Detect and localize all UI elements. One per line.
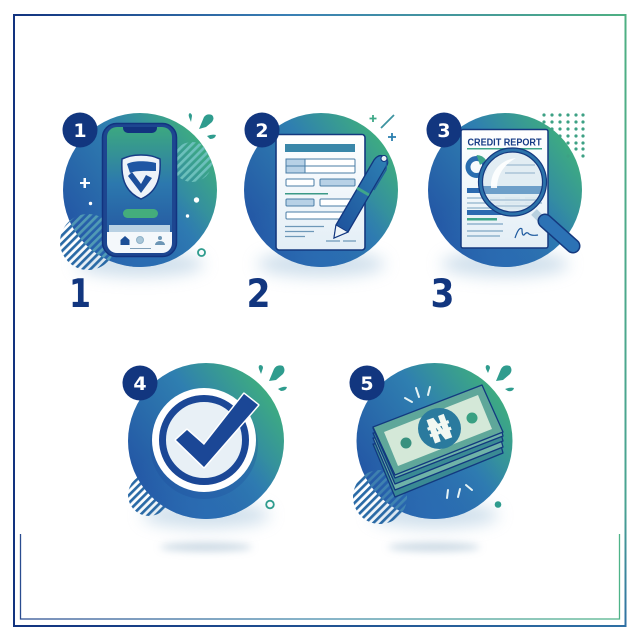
icon: splash accents bbox=[189, 113, 216, 139]
step 3: credit report check bbox=[426, 112, 585, 317]
icon: sparks bbox=[370, 115, 396, 141]
icon: check ring bbox=[152, 388, 256, 492]
disc lower tint bbox=[128, 363, 284, 519]
stripes on disc bbox=[364, 470, 407, 512]
number badge 5: 5 bbox=[360, 373, 374, 395]
soft shadow bbox=[370, 502, 498, 528]
stripes on disc bbox=[70, 142, 212, 260]
icon: credit report document bbox=[461, 130, 548, 248]
number badge 2 bbox=[244, 112, 280, 148]
icon: check mark bbox=[176, 394, 258, 467]
stripe patch bbox=[353, 470, 407, 524]
number badge 4: 4 bbox=[133, 373, 147, 395]
disc bbox=[428, 113, 582, 267]
ground shadow bbox=[388, 542, 480, 552]
ring shadow bbox=[150, 391, 258, 499]
number badge 1 bbox=[62, 112, 98, 148]
step number 1: 1 bbox=[69, 272, 91, 317]
icon: pen bbox=[334, 156, 388, 238]
icon: small ring bbox=[266, 501, 274, 508]
soft shadow bbox=[76, 251, 204, 277]
icon: phone bbox=[102, 124, 176, 256]
icon: small ring bbox=[198, 249, 205, 256]
disc bbox=[356, 363, 512, 519]
top banknote bbox=[373, 385, 503, 475]
soft shadow bbox=[142, 502, 270, 528]
step 4: approval bbox=[122, 363, 287, 552]
ground shadow bbox=[160, 542, 252, 552]
icon: bank shield bbox=[122, 155, 160, 199]
number badge 4 bbox=[122, 366, 158, 400]
soft shadow bbox=[441, 251, 569, 277]
icon: sparks and dots bbox=[80, 178, 199, 218]
naira symbol: ₦ bbox=[422, 407, 458, 453]
number badge 5 bbox=[350, 366, 384, 400]
soft shadow bbox=[257, 251, 385, 277]
icon: burst lines bbox=[405, 387, 472, 498]
disc bbox=[128, 363, 284, 519]
inner bottom bracket bbox=[20, 534, 620, 619]
icon: banknote stack bbox=[373, 385, 503, 497]
icon: form document bbox=[276, 134, 365, 250]
number badge 2: 2 bbox=[255, 120, 269, 142]
step 5: cash disbursed bbox=[350, 363, 514, 552]
icon: splash accents bbox=[486, 365, 514, 391]
step number 2: 2 bbox=[246, 272, 270, 317]
step number 3: 3 bbox=[430, 272, 454, 317]
icon: small dot bbox=[495, 501, 501, 508]
disc bbox=[63, 113, 217, 267]
disc lower tint bbox=[63, 113, 217, 267]
disc lower tint bbox=[356, 363, 512, 519]
disc lower tint bbox=[244, 113, 398, 267]
stripe patch bbox=[60, 214, 116, 270]
icon: magnifying glass bbox=[478, 148, 573, 246]
number badge 3: 3 bbox=[437, 120, 451, 142]
number badge 1: 1 bbox=[73, 120, 87, 142]
disc bbox=[244, 113, 398, 267]
icon: dot grid bbox=[542, 113, 585, 158]
step 2: fill out form bbox=[244, 112, 398, 317]
disc lower tint bbox=[428, 113, 582, 267]
icon: splash accents bbox=[259, 365, 287, 391]
step 1: mobile app bbox=[60, 112, 217, 317]
stripe patch bbox=[128, 474, 170, 516]
number badge 3 bbox=[426, 112, 462, 148]
report heading: CREDIT REPORT bbox=[468, 138, 542, 148]
